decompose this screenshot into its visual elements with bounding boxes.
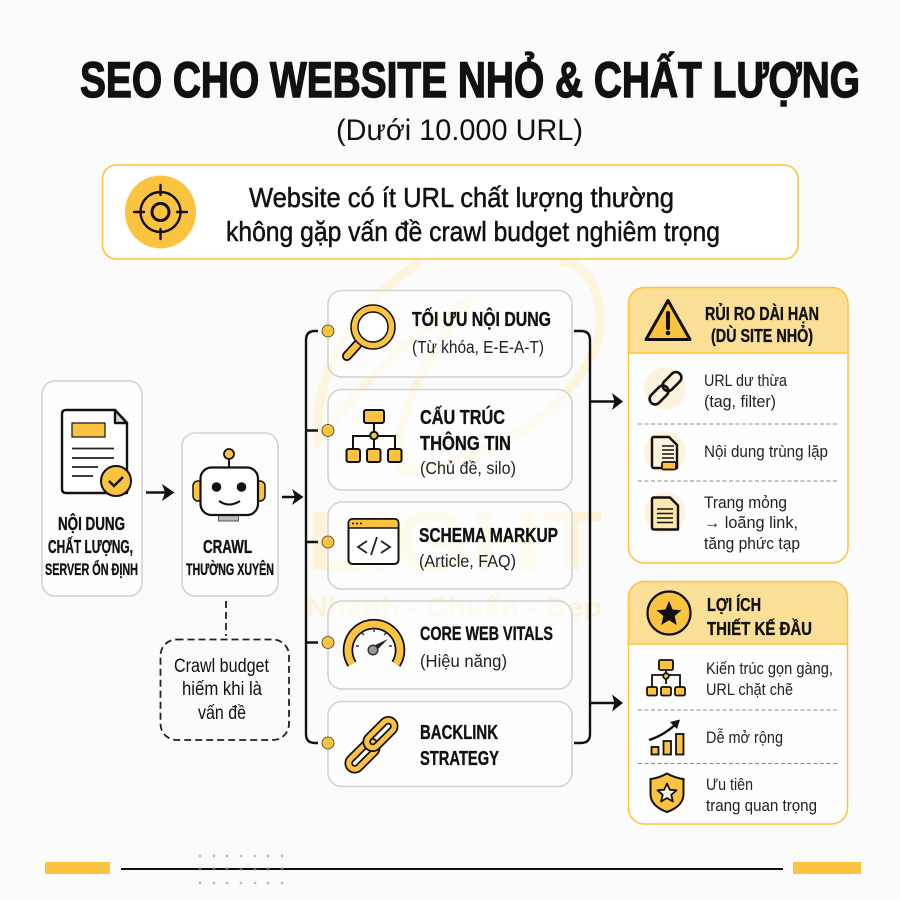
- text: [412, 307, 551, 357]
- left bracket: [306, 331, 318, 743]
- text: SCHEMA MARKUP: [419, 525, 558, 547]
- item: scalable: [649, 720, 783, 754]
- icon: hierarchy: [346, 410, 402, 462]
- panel: key message banner: [102, 165, 798, 259]
- item: thin pages: tăng phức tạp: [704, 535, 800, 553]
- text: (Article, FAQ): [419, 551, 516, 571]
- text: BACKLINK: [420, 722, 498, 744]
- panel: early design benefits: [628, 582, 848, 824]
- item: priority pages: trang quan trọng: [706, 797, 817, 815]
- arrow: crawl to branches: [282, 489, 304, 505]
- text: [420, 405, 516, 478]
- text: [419, 525, 558, 571]
- text: TỐI ƯU NỘI DUNG: [412, 307, 551, 331]
- label: NỘI DUNG: [58, 513, 125, 534]
- text: CORE WEB VITALS: [420, 624, 553, 645]
- panel: quality content: [42, 381, 142, 596]
- label: [45, 513, 138, 579]
- callout: crawl budget note: [160, 640, 289, 740]
- label: THƯỜNG XUYÊN: [186, 560, 274, 579]
- panel: core web vitals: [328, 601, 572, 689]
- heading: LỢI ÍCH: [707, 594, 761, 615]
- icon: chain: [346, 718, 397, 772]
- item: redundant URLs: URL dư thừa: [704, 372, 788, 390]
- panel: backlink strategy: [328, 702, 572, 786]
- label: CHẤT LƯỢNG,: [48, 536, 133, 557]
- watermark: Nhanh - Chuẩn - Đẹp: [306, 592, 602, 622]
- callout: crawl budget note: vấn đề: [198, 703, 246, 724]
- panel: crawl: [182, 433, 278, 596]
- arrow: to benefits: [590, 694, 623, 712]
- text: [420, 722, 499, 770]
- panel: schema markup: [328, 502, 572, 589]
- banner text: Website có ít URL chất lượng thường: [249, 182, 674, 213]
- icon: code window: [348, 519, 398, 564]
- icon: gauge: [348, 624, 400, 664]
- watermark: LIGHT: [306, 494, 602, 588]
- label: CRAWL: [203, 537, 252, 557]
- item: thin pages: → loãng link,: [704, 514, 798, 532]
- item: duplicate content: Nội dung trùng lặp: [704, 443, 828, 461]
- label: SERVER ỔN ĐỊNH: [45, 560, 138, 579]
- right bracket: [574, 331, 590, 743]
- item: priority pages: Ưu tiên: [706, 776, 753, 794]
- item: tidy architecture: URL chặt chẽ: [706, 681, 793, 699]
- icon: document with check: [62, 410, 131, 496]
- item: scalable: Dễ mở rộng: [706, 728, 783, 747]
- text: (Chủ đề, silo): [420, 458, 516, 478]
- icon: robot: [193, 449, 265, 521]
- arrow: to risks: [590, 393, 623, 410]
- text: (Hiệu năng): [420, 651, 507, 671]
- panel: long-term risks: [628, 288, 848, 563]
- panel: information architecture: [328, 390, 572, 490]
- item: duplicate content: [644, 431, 828, 473]
- item: tidy architecture: [647, 660, 833, 699]
- footer: [45, 855, 861, 884]
- heading: [707, 594, 812, 639]
- heading: (DÙ SITE NHỎ): [711, 325, 813, 346]
- heading: RỦI RO DÀI HẠN: [705, 303, 819, 324]
- heading: [705, 303, 819, 346]
- connector: dashed: [225, 601, 227, 636]
- callout: crawl budget note: hiếm khi là: [182, 679, 262, 700]
- subtitle: (Dưới 10.000 URL): [336, 114, 583, 147]
- icon: warning: [646, 300, 690, 340]
- connector dots: [322, 325, 334, 749]
- text: STRATEGY: [420, 748, 499, 770]
- callout: crawl budget note: Crawl budget: [174, 656, 270, 677]
- text: [420, 624, 553, 671]
- item: tidy architecture: Kiến trúc gọn gàng,: [706, 660, 833, 678]
- banner text: [226, 182, 720, 247]
- icon: magnifier: [347, 308, 392, 356]
- item: priority pages: [650, 774, 817, 815]
- arrow: content to crawl: [146, 484, 174, 501]
- item: redundant URLs: (tag, filter): [704, 393, 776, 411]
- icon: star badge: [648, 592, 690, 634]
- text: CẤU TRÚC: [420, 405, 505, 429]
- item: thin pages: [644, 492, 800, 553]
- icon: target: [125, 176, 196, 248]
- panel: content optimisation: [328, 290, 572, 377]
- item: thin pages: Trang mỏng: [704, 494, 787, 512]
- item: redundant URLs: [644, 368, 788, 411]
- label: [186, 537, 274, 579]
- watermark: [306, 262, 602, 622]
- heading: THIẾT KẾ ĐẦU: [707, 618, 812, 639]
- banner text: không gặp vấn đề crawl budget nghiêm trọng: [226, 216, 720, 247]
- text: (Từ khóa, E-E-A-T): [412, 337, 544, 357]
- text: THÔNG TIN: [420, 431, 511, 455]
